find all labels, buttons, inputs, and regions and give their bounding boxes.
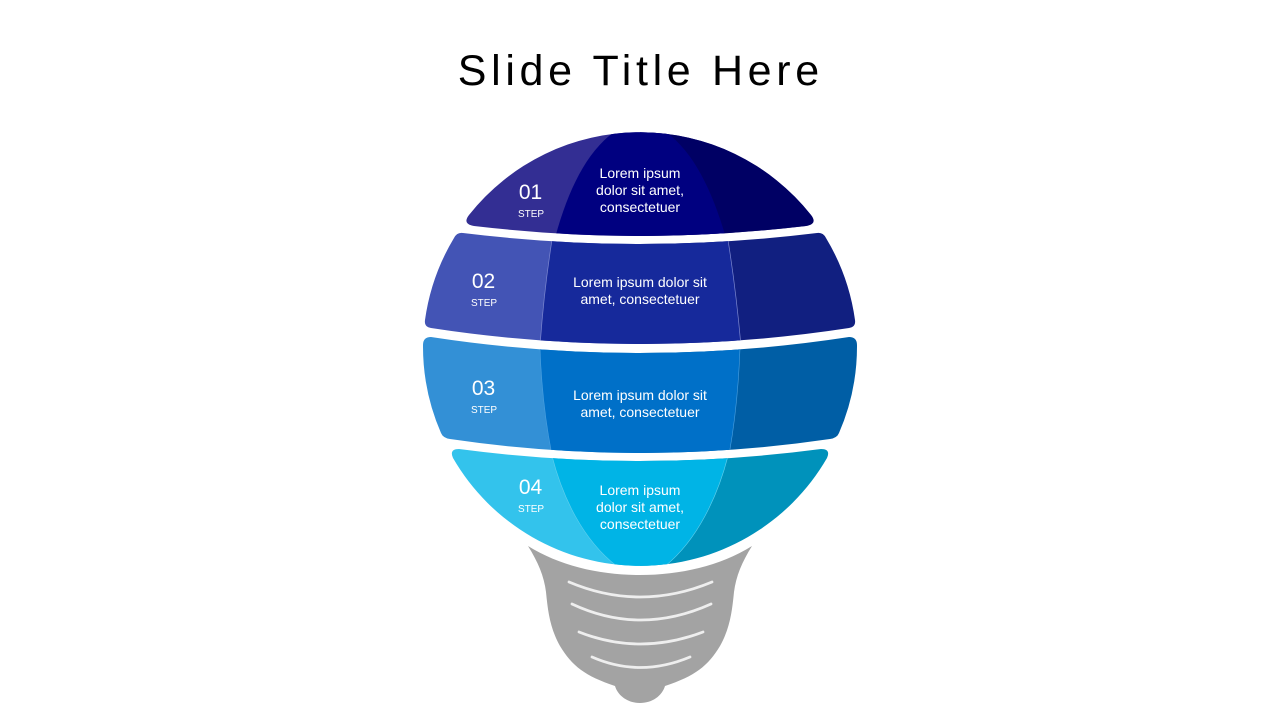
step 04 description: dolor sit amet, bbox=[596, 499, 684, 515]
step 04 description: Lorem ipsum bbox=[600, 482, 680, 498]
step 03 number: 03 bbox=[472, 377, 495, 400]
step 03 label: STEP bbox=[471, 405, 497, 416]
step 02 description: amet, consectetuer bbox=[580, 291, 700, 307]
step 01 description: consectetuer bbox=[600, 199, 680, 215]
step 01 description: dolor sit amet, bbox=[596, 182, 684, 198]
step 02 description: Lorem ipsum dolor sit bbox=[573, 274, 707, 290]
step 01 description: Lorem ipsum bbox=[600, 165, 680, 181]
step 03 description: Lorem ipsum dolor sit bbox=[573, 387, 707, 403]
step 04 number: 04 bbox=[519, 476, 542, 499]
step 01 number: 01 bbox=[519, 181, 542, 204]
title: Slide Title Here bbox=[458, 47, 824, 95]
step 01 label: STEP bbox=[518, 209, 544, 220]
panel: step 02 band bbox=[420, 228, 860, 348]
panel: step 01 band bbox=[466, 132, 814, 236]
step 03 description: amet, consectetuer bbox=[580, 404, 700, 420]
panel: step 03 band bbox=[420, 332, 860, 457]
infographic canvas bbox=[423, 54, 857, 703]
step 02 number: 02 bbox=[472, 270, 495, 293]
icon: light bulb base bbox=[528, 546, 752, 703]
step 04 description: consectetuer bbox=[600, 516, 680, 532]
step 02 label: STEP bbox=[471, 298, 497, 309]
step 04 label: STEP bbox=[518, 504, 544, 515]
panel: step 04 band bbox=[445, 445, 835, 570]
